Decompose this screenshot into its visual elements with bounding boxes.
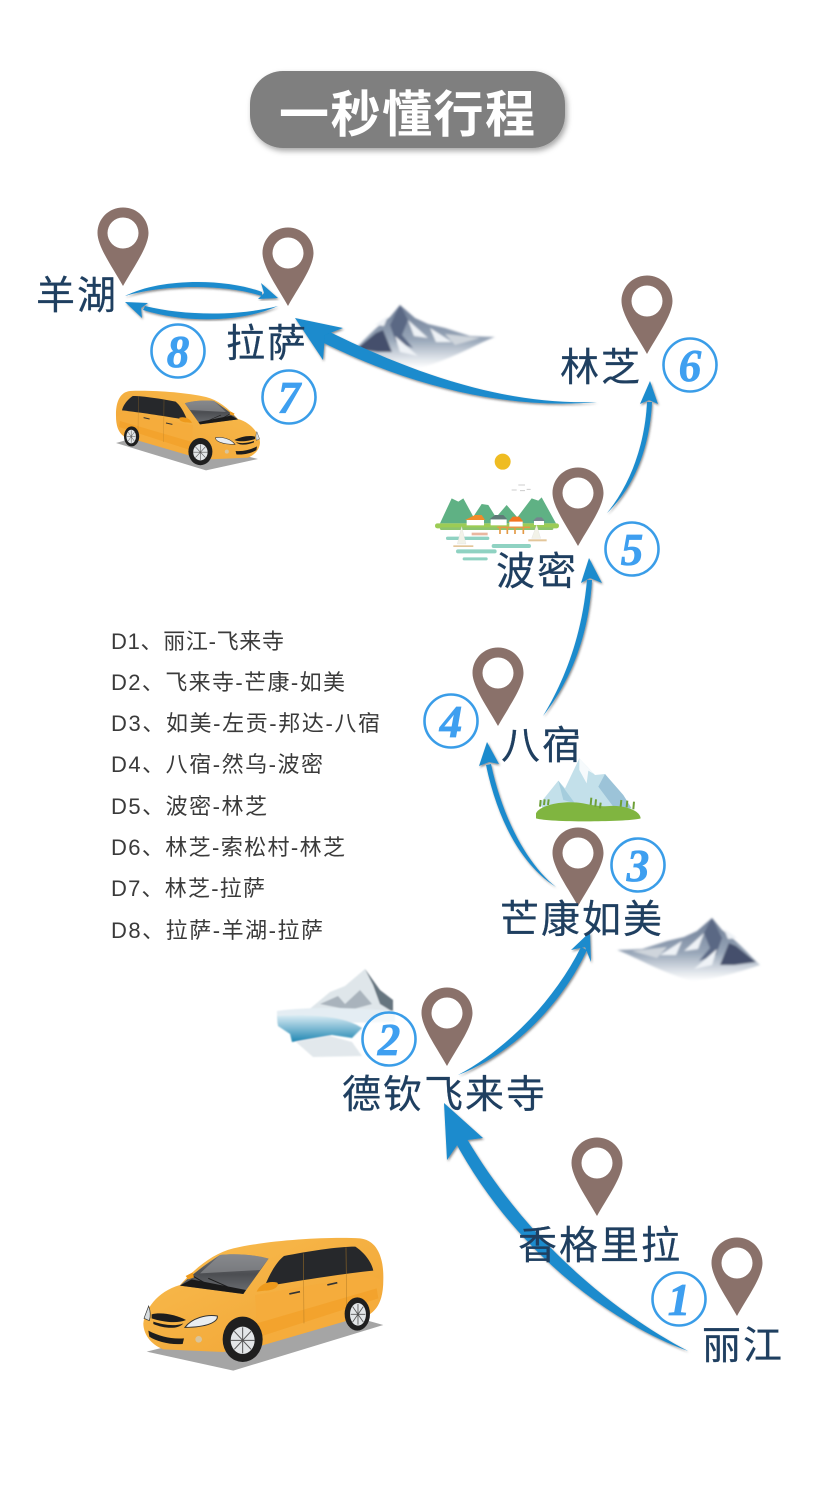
mountain illustration: near Lhasa [352,305,495,368]
itinerary list: D7、林芝-拉萨 [111,876,265,901]
badge 2: 2 [377,1015,400,1065]
arrow: Basu to Bomi [543,558,602,716]
badge 1: 1 [668,1275,690,1325]
label: 德钦飞来寺: 德钦飞来寺 [342,1074,547,1117]
icon: pin Yamdrok [98,208,148,286]
arrow: Nyingchi to Lhasa [295,318,597,404]
icon: pin Lhasa [262,228,314,306]
badge 2 [362,1012,416,1066]
badge 3 [612,838,664,892]
itinerary list: D3、如美-左贡-邦达-八宿 [111,711,380,736]
mountain illustration: near Mangkang [617,918,760,981]
badge 7 [262,370,316,424]
itinerary list [111,629,380,943]
label: 拉萨: 拉萨 [226,323,308,366]
icon: pin Basu [472,648,524,726]
badge 4: 4 [439,697,462,747]
itinerary list: D1、丽江-飞来寺 [111,629,284,654]
illustration: glacier lake [277,969,395,1057]
arrow: Yamdrok to Lhasa [125,282,278,299]
itinerary list: D5、波密-林芝 [111,794,267,819]
icon: pin Nyingchi [622,276,672,354]
badge 8 [152,324,204,378]
label: 八宿: 八宿 [501,725,583,768]
label: 林芝: 林芝 [560,347,642,390]
icon: pin Deqin [422,988,472,1066]
icon: sun [495,454,511,470]
arrow: Mangkang to Basu [479,742,556,887]
itinerary list: D6、林芝-索松村-林芝 [111,835,345,860]
label: 香格里拉: 香格里拉 [518,1225,682,1268]
title text: 一秒懂行程 [279,87,536,143]
badge 6: 6 [679,341,702,391]
illustration: lakeside village with sun [435,454,559,560]
badge 7: 7 [278,373,302,423]
badge 8: 8 [167,327,189,377]
badge 5 [606,522,658,576]
arrow: Bomi to Nyingchi [607,381,658,513]
icon: small yellow van [116,391,260,470]
icon: pin Shangri-La [572,1138,622,1216]
itinerary list: D4、八宿-然乌-波密 [111,752,323,777]
badge 3: 3 [626,841,649,891]
badge 5: 5 [621,525,643,575]
icon: pin Bomi [552,468,604,546]
badge 6 [664,338,716,392]
arrow: Deqin to Mangkang [458,932,591,1075]
label: 芒康如美: 芒康如美 [500,899,664,942]
icon: pin Mangkang [552,828,604,906]
title pill [250,71,565,148]
label: 羊湖: 羊湖 [36,275,118,318]
illustration: green hill and snow mountain [536,758,641,821]
arrow: Lijiang to Deqin [444,1103,688,1351]
label: 波密: 波密 [496,551,578,594]
badge 1 [652,1272,706,1326]
badge 4 [424,694,478,748]
icon: large yellow van [143,1238,383,1371]
arrow: Lhasa to Yamdrok [125,302,278,319]
label: 丽江: 丽江 [702,1325,784,1368]
itinerary list: D8、拉萨-羊湖-拉萨 [111,918,323,943]
itinerary list: D2、飞来寺-芒康-如美 [111,670,345,695]
icon: pin Lijiang [712,1238,762,1316]
